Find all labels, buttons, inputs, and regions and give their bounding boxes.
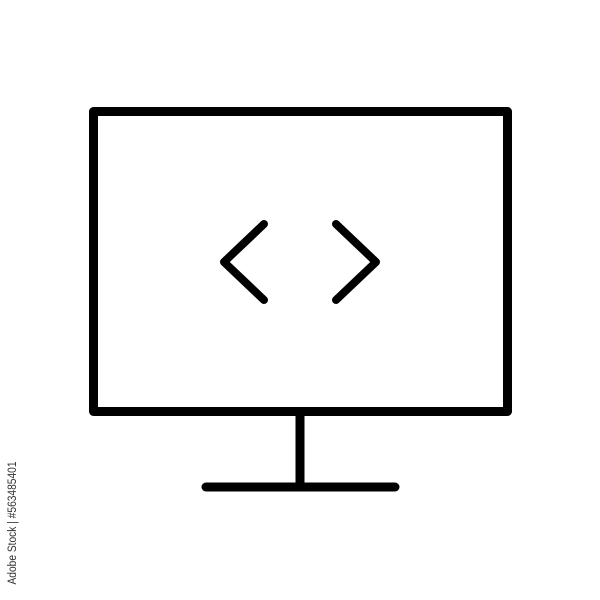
side id text: Adobe Stock | #563485401 xyxy=(7,462,19,584)
monitor screen xyxy=(94,112,508,412)
icon: left chevron xyxy=(224,224,264,300)
monitor stand xyxy=(206,414,395,487)
icon: right chevron xyxy=(336,224,376,300)
